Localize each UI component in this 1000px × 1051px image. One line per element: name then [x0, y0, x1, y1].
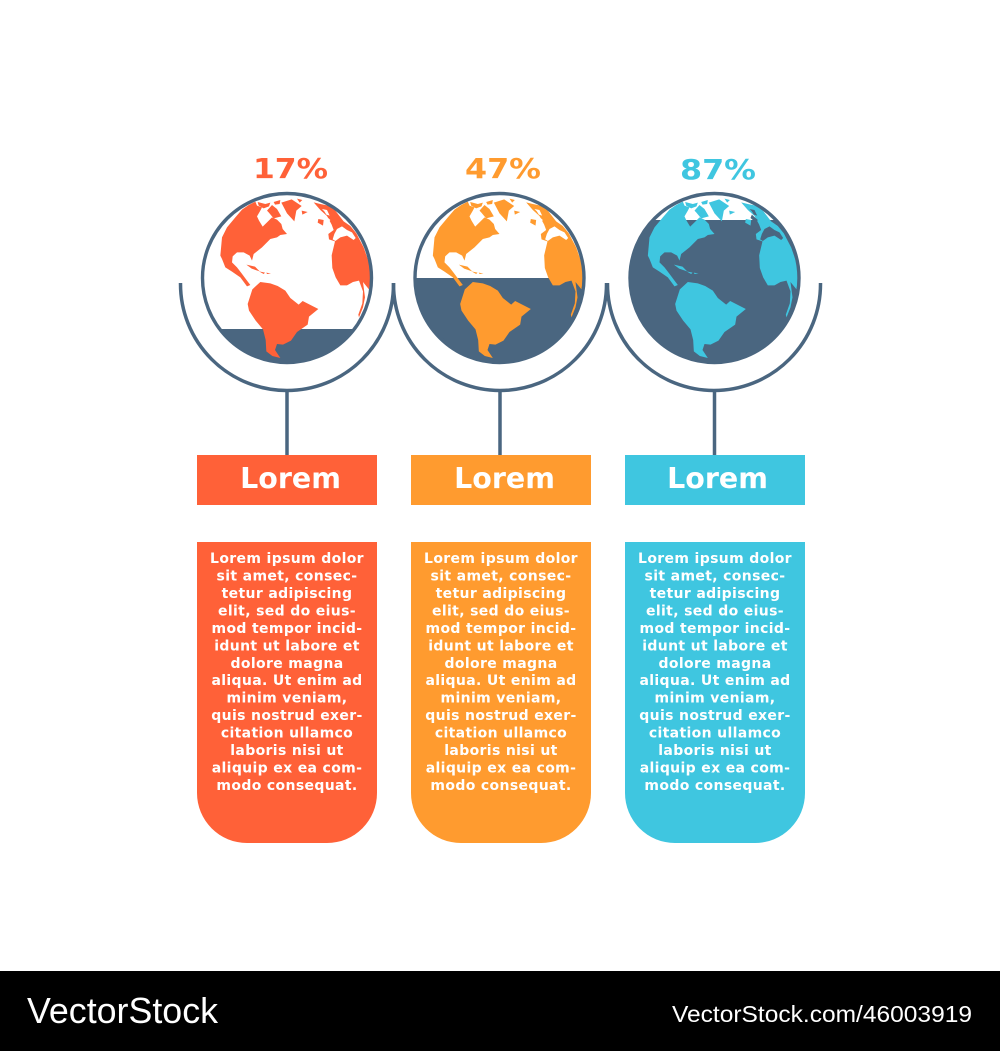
- text panel 1: dolore magna: [230, 656, 344, 672]
- text panel 3: [625, 542, 805, 843]
- text panel 1: modo consequat.: [216, 778, 358, 794]
- heading box 3: Lorem: [667, 462, 768, 495]
- cradle arc and stem 2: [394, 283, 606, 455]
- text panel 2: dolore magna: [444, 656, 558, 672]
- text panel 2: quis nostrud exer-: [425, 708, 577, 724]
- cradle arc and stem 1: [180, 283, 394, 455]
- text panel 3: minim veniam,: [655, 691, 775, 707]
- heading box 2: [411, 455, 591, 505]
- text panel 3: elit, sed do eius-: [646, 603, 784, 619]
- text panel 1: citation ullamco: [221, 726, 353, 742]
- text panel 3: dolore magna: [658, 656, 772, 672]
- text panel 3: Lorem ipsum dolor: [638, 551, 792, 567]
- globe: 87%: [630, 193, 800, 363]
- text panel 1: sit amet, consec-: [217, 568, 357, 584]
- heading box 1: [197, 455, 377, 505]
- text panel 3: tetur adipiscing: [650, 586, 780, 602]
- text panel 3: laboris nisi ut: [658, 743, 772, 759]
- percentage: 87%: 87%: [680, 153, 756, 186]
- text panel 2: minim veniam,: [441, 691, 561, 707]
- heading box 2: Lorem: [454, 462, 555, 495]
- globe: 47%: [414, 193, 584, 363]
- text panel 2: Lorem ipsum dolor: [424, 551, 578, 567]
- text panel 2: mod tempor incid-: [426, 621, 576, 637]
- text panel 2: [411, 542, 591, 843]
- percentage: 17%: 17%: [253, 152, 328, 185]
- text panel 2: sit amet, consec-: [431, 568, 571, 584]
- text panel 3: quis nostrud exer-: [639, 708, 791, 724]
- text panel 1: minim veniam,: [227, 691, 347, 707]
- text panel 1: elit, sed do eius-: [218, 603, 356, 619]
- text panel 1: Lorem ipsum dolor: [210, 551, 364, 567]
- text panel 3: aliqua. Ut enim ad: [639, 673, 791, 689]
- text panel 2: modo consequat.: [430, 778, 572, 794]
- heading box 1: Lorem: [240, 462, 341, 495]
- percentage: 47%: 47%: [465, 152, 541, 185]
- text panel 3: citation ullamco: [649, 726, 781, 742]
- text panel 3: mod tempor incid-: [640, 621, 790, 637]
- watermark footer: VectorStock: [27, 990, 219, 1031]
- text panel 3: idunt ut labore et: [642, 638, 788, 654]
- heading box 3: [625, 455, 805, 505]
- text panel 1: mod tempor incid-: [212, 621, 362, 637]
- cradle arc and stem 3: [608, 283, 820, 455]
- text panel 1: aliqua. Ut enim ad: [211, 673, 363, 689]
- text panel 3: modo consequat.: [644, 778, 786, 794]
- text panel 1: tetur adipiscing: [222, 586, 352, 602]
- text panel 1: laboris nisi ut: [230, 743, 344, 759]
- text panel 1: quis nostrud exer-: [211, 708, 363, 724]
- text panel 2: idunt ut labore et: [428, 638, 574, 654]
- text panel 2: aliqua. Ut enim ad: [425, 673, 577, 689]
- text panel 2: elit, sed do eius-: [432, 603, 570, 619]
- text panel 2: aliquip ex ea com-: [426, 760, 576, 776]
- text panel 3: aliquip ex ea com-: [640, 760, 790, 776]
- text panel 2: citation ullamco: [435, 726, 567, 742]
- text panel 2: tetur adipiscing: [436, 586, 566, 602]
- text panel 2: laboris nisi ut: [444, 743, 558, 759]
- text panel 1: [197, 542, 377, 843]
- text panel 1: aliquip ex ea com-: [212, 760, 362, 776]
- text panel 1: idunt ut labore et: [214, 638, 360, 654]
- watermark footer: [0, 971, 1000, 1051]
- text panel 3: sit amet, consec-: [645, 568, 785, 584]
- globe: 17%: [202, 193, 372, 363]
- watermark footer: VectorStock.com/46003919: [672, 1001, 972, 1027]
